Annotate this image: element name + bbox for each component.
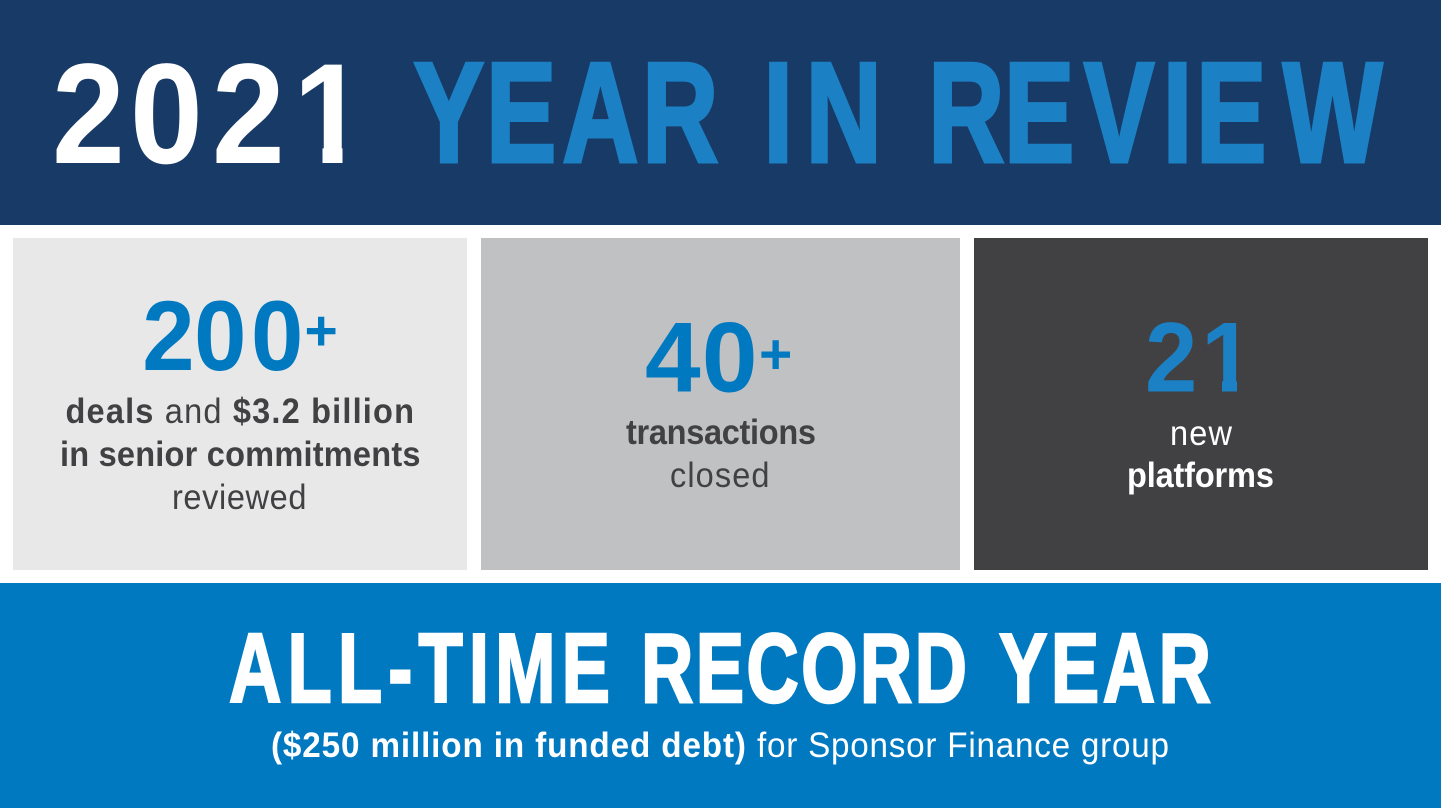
description: deals and $3.2 billion in senior commitments reviewed: in senior commitments [60,435,420,474]
stat: 21: 21 [1145,303,1254,413]
description: deals and $3.2 billion in senior commitments reviewed: deals and $3.2 billion [66,392,414,431]
description: transactions closed: closed [670,456,770,495]
panel: 40+ transactions [481,238,960,570]
header band [0,0,1441,225]
stat: 40+: + [759,322,792,386]
panel: 21 new platforms [974,238,1428,570]
headline: ALL-TIME RECORD YEAR: YEAR [999,614,1211,724]
description: transactions closed: transactions [626,413,816,452]
subheading: funded debt: ($250 million in funded debt) [271,726,746,765]
stat: 200+: + [304,299,338,363]
headline: ALL-TIME RECORD YEAR: ALL-TIME [229,614,610,724]
description: new platforms: platforms [1127,456,1274,495]
panel: 200+ deals [13,238,467,570]
headline: ALL-TIME RECORD YEAR: RECORD [641,614,967,724]
subheading: funded debt: for Sponsor Finance group [757,726,1169,765]
description: transactions closed [626,413,816,495]
title: YEAR IN REVIEW: YEAR IN REVIEW [414,34,1382,192]
stat: 200+: 200 [142,282,303,392]
subheading: funded debt [271,726,1169,765]
description: new platforms: new [1170,414,1233,453]
description: deals and $3.2 billion in senior commitments reviewed [60,392,420,517]
description: deals and $3.2 billion in senior commitments reviewed: reviewed [172,478,306,517]
title year: 2021: 2021 [52,35,366,194]
headline: ALL-TIME RECORD YEAR [229,614,1211,724]
stat: 40+: 40 [645,303,758,413]
footer band [0,583,1441,808]
description: new platforms [1127,414,1274,495]
